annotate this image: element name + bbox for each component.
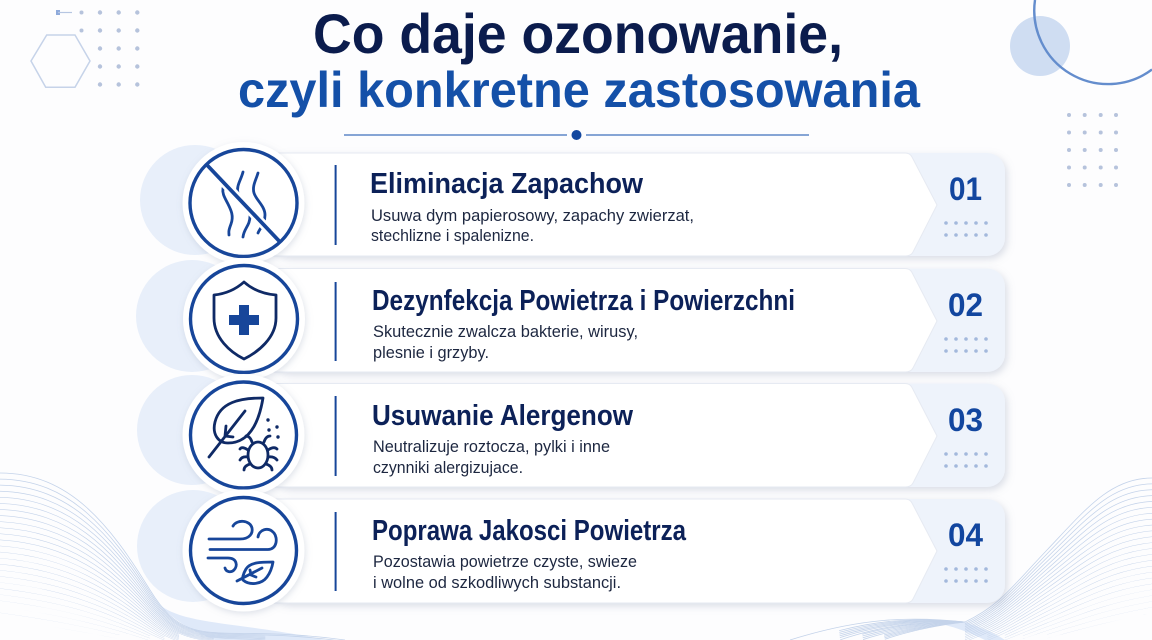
heading 1: Eliminacja Zapachow: [370, 168, 643, 200]
description 2: Skutecznie zwalcza bakterie, wirusy,: [373, 323, 638, 341]
dots 3: [944, 452, 988, 468]
description 1: [371, 207, 694, 245]
divider 4: [335, 512, 337, 591]
dots 1: [944, 221, 988, 237]
card 3: [270, 384, 1005, 487]
background wave: right: [790, 478, 1152, 640]
number 04: 04: [948, 517, 983, 553]
icon: leaf and mite: [182, 374, 304, 496]
heading 3: Usuwanie Alergenow: [372, 400, 633, 432]
number 03: 03: [948, 402, 983, 438]
back circle 2: [136, 260, 248, 372]
heading 2: Dezynfekcja Powietrza i Powierzchni: [372, 285, 795, 317]
dots 2: [944, 337, 988, 353]
title: [238, 2, 921, 118]
title divider: [344, 130, 809, 140]
dots 4: [944, 567, 988, 583]
divider 3: [335, 396, 337, 476]
description 4: i wolne od szkodliwych substancji.: [373, 574, 621, 592]
icon: wind and leaf: [182, 490, 304, 612]
decoration: top-left hexagon and dots: [31, 10, 140, 87]
heading 4: Poprawa Jakosci Powietrza: [372, 515, 687, 547]
divider 1: [335, 165, 337, 245]
description 4: Pozostawia powietrze czyste, swieze: [373, 553, 637, 571]
number 02: 02: [948, 287, 983, 323]
description 3: Neutralizuje roztocza, pylki i inne: [373, 438, 610, 456]
title: czyli konkretne zastosowania: [238, 62, 921, 118]
card 4: [270, 499, 1005, 603]
row 1: Eliminacja Zapachow: [140, 142, 1005, 264]
description 3: [373, 438, 610, 477]
row 2: Dezynfekcja Powietrza i Powierzchni: [136, 258, 1005, 380]
description 2: [373, 323, 638, 362]
divider 2: [335, 282, 337, 361]
background wave: left: [0, 473, 345, 640]
back circle 3: [137, 375, 247, 485]
title: Co daje ozonowanie,: [313, 2, 843, 65]
row 3: Usuwanie Alergenow: [137, 374, 1005, 496]
card 1: [270, 153, 1005, 256]
number 01: 01: [949, 171, 982, 207]
description 4: [373, 553, 637, 592]
description 2: plesnie i grzyby.: [373, 344, 489, 362]
description 3: czynniki alergizujace.: [373, 459, 523, 477]
icon: shield with cross: [183, 258, 305, 380]
card 2: [270, 268, 1005, 372]
description 1: stechlizne i spalenizne.: [371, 227, 534, 245]
back circle 1: [140, 145, 250, 255]
description 1: Usuwa dym papierosowy, zapachy zwierzat,: [371, 207, 694, 225]
row 4: Poprawa Jakosci Powietrza: [137, 490, 1005, 612]
decoration: right dot grid: [1067, 113, 1118, 187]
back circle 4: [137, 490, 249, 602]
icon: no odors: [182, 142, 304, 264]
decoration: top-right circles: [1010, 0, 1152, 84]
